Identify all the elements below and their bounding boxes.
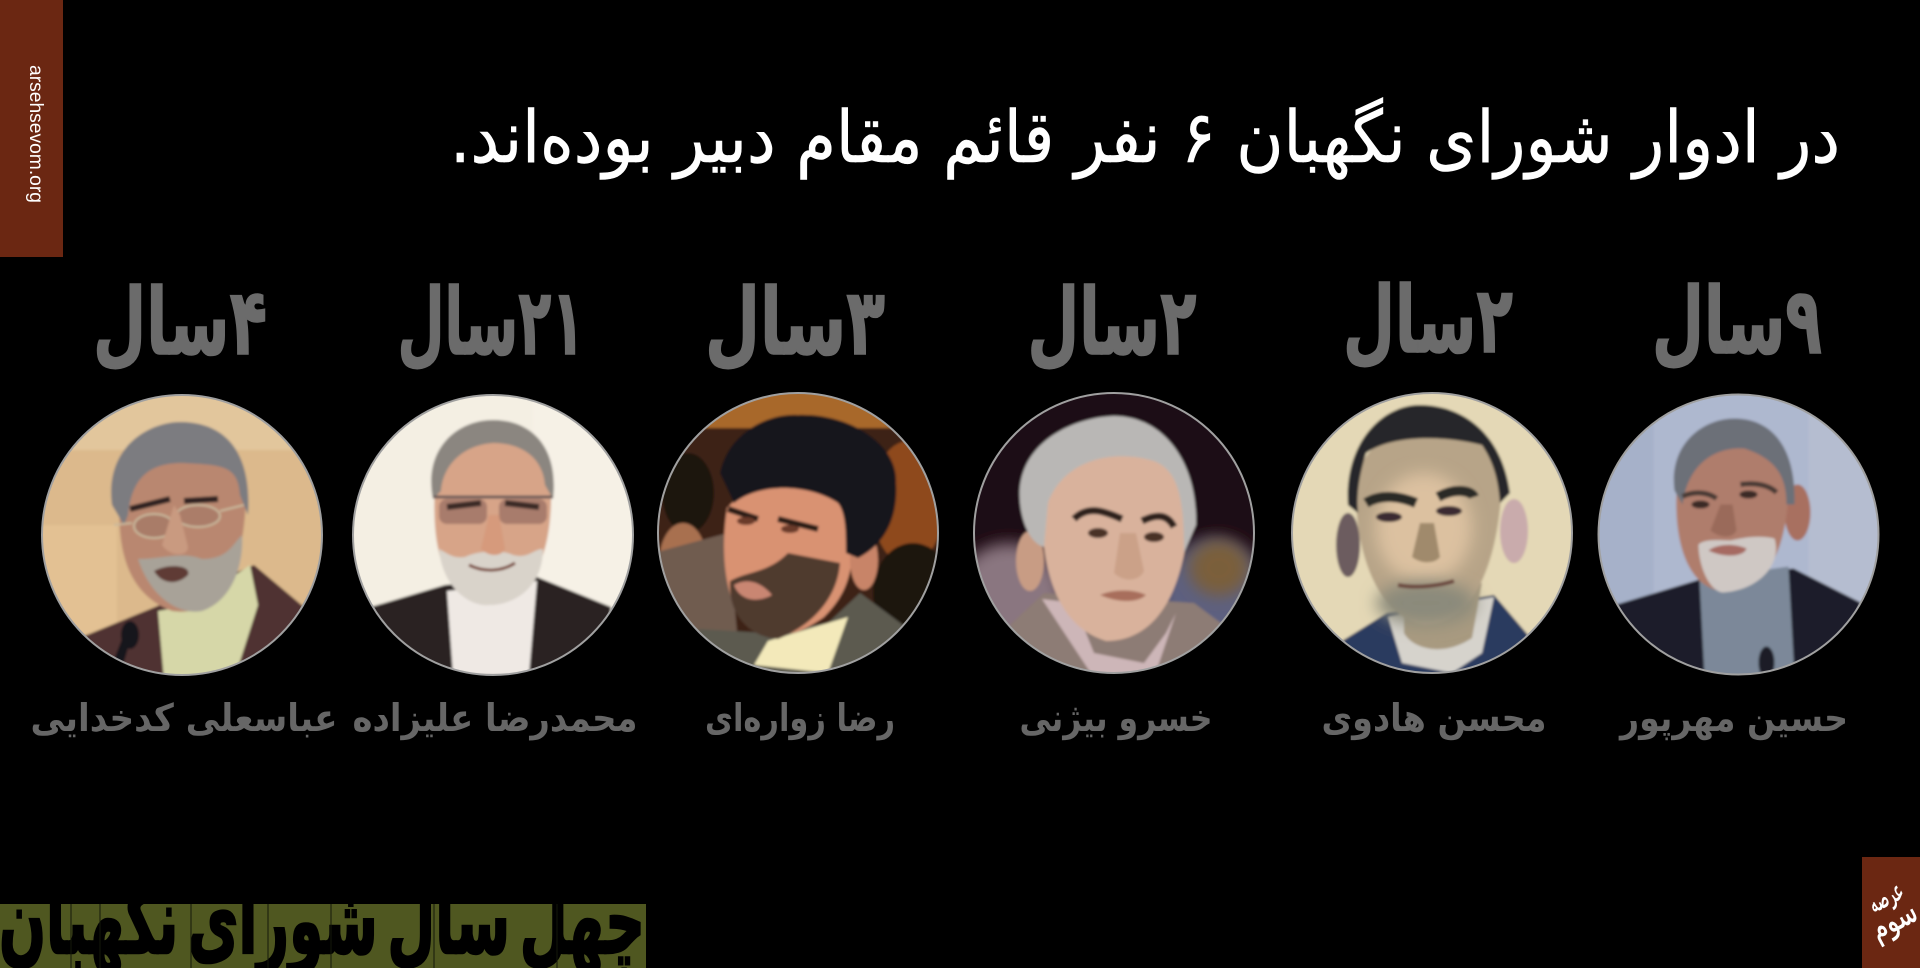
name: محسن هادوی: [1322, 696, 1546, 741]
panel: Khosrow Bijani: [973, 283, 1255, 740]
tenure: ۲سال: [1343, 267, 1513, 374]
panel: Reza Zavarei: [653, 269, 953, 741]
tenure: ۴سال: [93, 269, 267, 376]
portrait: [1594, 390, 1888, 680]
title: در ادوار شورای نگهبان ۶ نفر قائم مقام دبیر بوده‌اند.: [450, 95, 1840, 180]
name: رضا زواره‌ای: [705, 696, 895, 741]
name: خسرو بیژنی: [1020, 696, 1212, 741]
panel: Mohsen Hadavi: [1287, 267, 1577, 741]
tenure: ۲سال: [1028, 269, 1196, 376]
side tab: website: [0, 0, 63, 257]
portrait: [973, 392, 1255, 674]
portrait: [37, 390, 327, 680]
tenure: ۹سال: [1652, 268, 1822, 375]
panel: Mohammadreza Alizadeh: [348, 269, 643, 740]
portrait: [653, 388, 953, 678]
name: محمدرضا علیزاده: [352, 696, 638, 740]
panel: Abbasali Kadkhodaei: [30, 269, 338, 740]
logo tab: [1854, 857, 1920, 968]
name: عباسعلی کدخدایی: [30, 696, 338, 740]
tenure: ۲۱سال: [397, 269, 584, 376]
portrait: [1287, 388, 1577, 678]
portrait: [348, 390, 643, 680]
banner: forty years of the Guardian Council: [0, 904, 646, 968]
name: حسین مهرپور: [1618, 696, 1848, 740]
tenure: ۳سال: [705, 269, 885, 376]
side tab: website: arsehsevom.org: [25, 65, 46, 203]
panel: Hossein Mehrpour: [1594, 268, 1888, 740]
